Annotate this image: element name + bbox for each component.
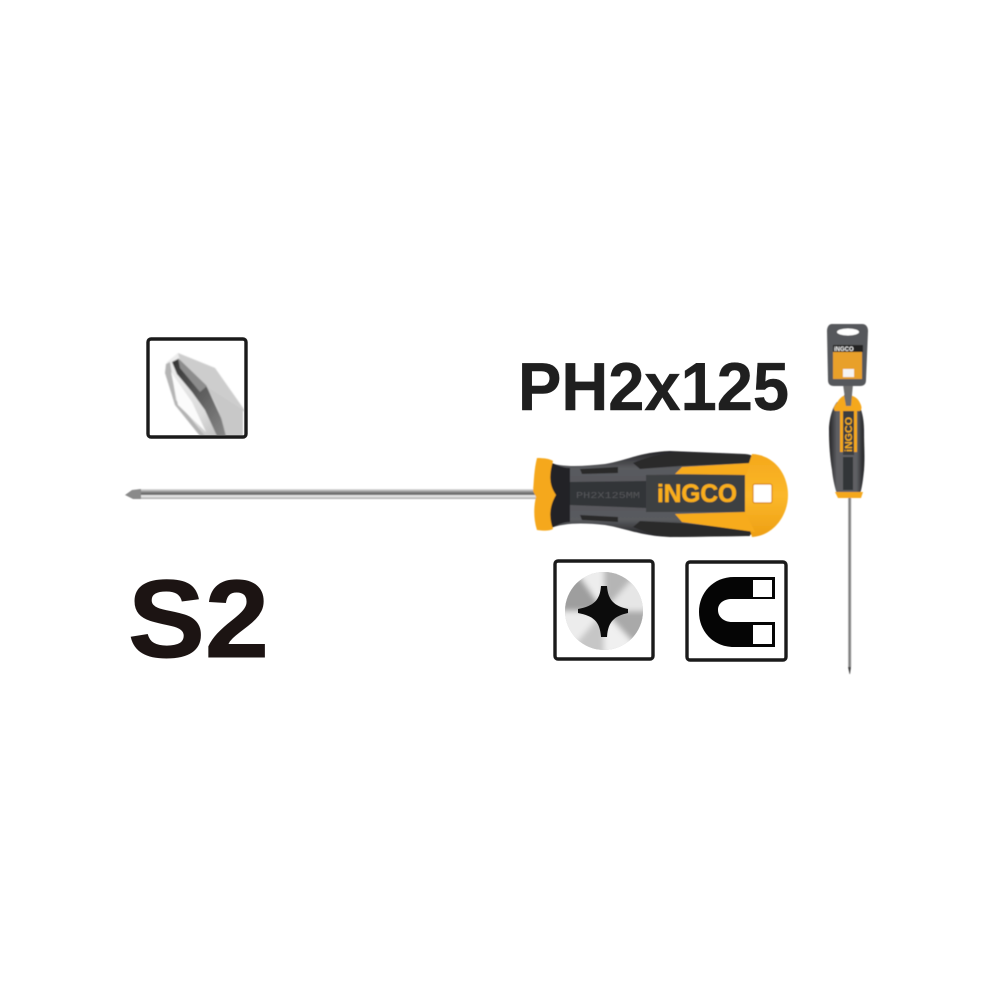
card hang hole: [837, 328, 859, 336]
hang hole: [753, 484, 772, 503]
card label: [833, 352, 862, 379]
embossed text: PH2X125MM: [576, 491, 640, 501]
blister card: [827, 324, 868, 386]
yellow end cap: [745, 454, 788, 537]
upper dark recess: [580, 467, 618, 474]
upper dark band: [633, 453, 750, 469]
icon: magnet: [687, 562, 786, 660]
right yellow strip: [854, 411, 857, 452]
dark logo panel: [646, 474, 745, 512]
shaft behind card: [843, 384, 853, 406]
small logo: iNGCO: [844, 417, 855, 452]
packaged screwdriver, vertical: [827, 324, 868, 674]
shaft: [138, 489, 536, 499]
card header: [833, 345, 863, 352]
neck shadow: [550, 462, 570, 529]
flange: [533, 458, 556, 531]
small flange: [835, 492, 863, 498]
small yellow cap: [834, 395, 862, 411]
small cap slot: [844, 395, 852, 406]
left yellow strip: [840, 411, 843, 452]
grip body: [548, 451, 772, 537]
yellow inlay top: [675, 456, 753, 475]
heading: steel grade S2: S2: [128, 558, 269, 681]
heading: model PH2x125: PH2x125: [518, 349, 789, 425]
small shaft: [848, 495, 851, 667]
small logo panel: [843, 411, 854, 455]
small lower panel: [843, 457, 853, 490]
card window: [843, 369, 854, 377]
icon: phillips bit tip: [148, 339, 246, 437]
tip: [125, 489, 141, 499]
logo: INGCO: iNGCO: [657, 480, 737, 508]
phillips recess: [578, 586, 628, 637]
icon: phillips screw head: [555, 561, 655, 659]
yellow inlay bottom: [675, 512, 755, 532]
small tip: [848, 667, 851, 674]
infographic canvas: [124, 323, 869, 674]
lower dark band: [633, 521, 750, 537]
main screwdriver, horizontal: [125, 451, 788, 537]
recessed label band: [570, 481, 646, 508]
small grip: [829, 402, 864, 494]
lower dark recess: [580, 515, 618, 522]
card logo: iNGCO: [834, 347, 854, 353]
